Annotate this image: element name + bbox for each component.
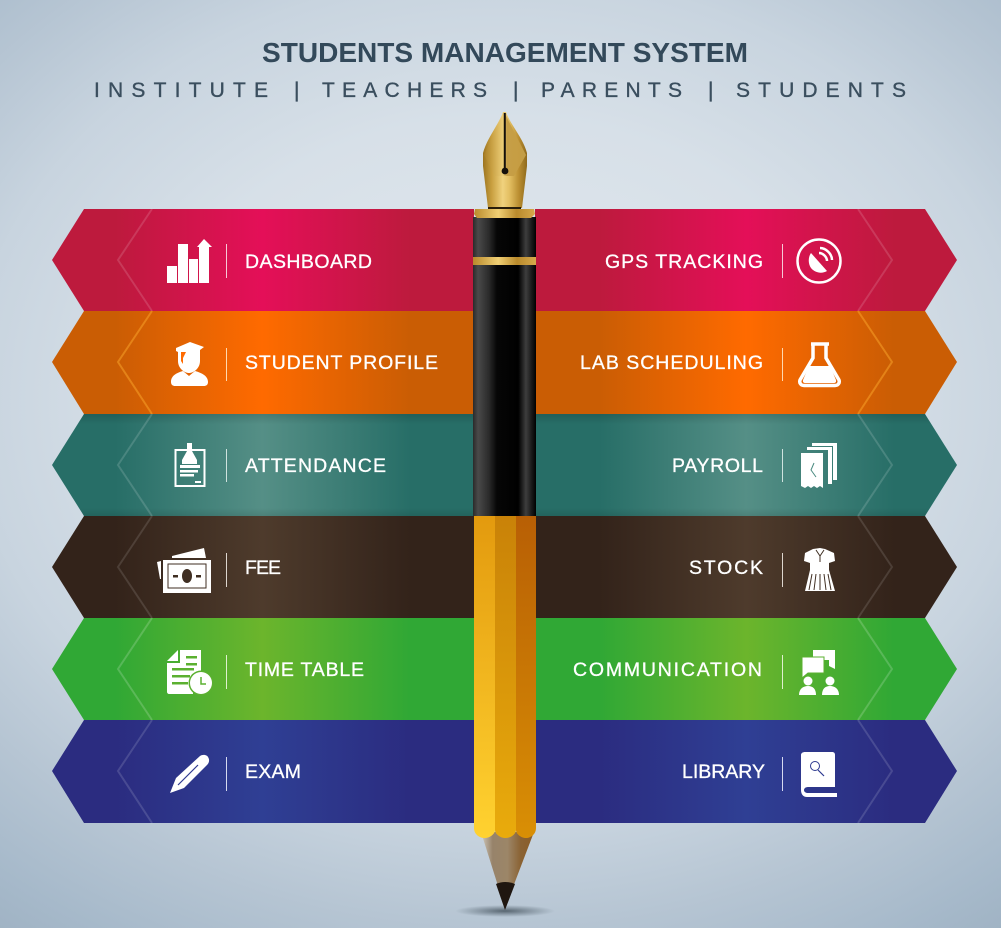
panel: lab scheduling: [535, 311, 957, 414]
subtitle: |: [513, 79, 518, 102]
panel: attendance: [52, 414, 474, 516]
subtitle: [94, 79, 906, 102]
subtitle: INSTITUTE: [94, 79, 268, 102]
subtitle: |: [708, 79, 713, 102]
icon: bar chart: [167, 239, 212, 283]
icon: book with magnifier: [801, 752, 837, 797]
panel: time table: [52, 618, 474, 720]
title: STUDENTS MANAGEMENT SYSTEM: [262, 37, 748, 68]
panel: gps tracking: [535, 209, 957, 311]
label: time table: TIME TABLE: [245, 659, 364, 681]
icon: uniform dress: [804, 548, 835, 591]
panel: dashboard: [52, 209, 474, 311]
pencil wood tip: [481, 832, 534, 908]
label: lab scheduling: LAB SCHEDULING: [580, 352, 763, 374]
icon: pencil: [170, 755, 209, 793]
pencil tip shadow: [455, 905, 555, 917]
panel: student profile: [52, 311, 474, 414]
icon: satellite: [798, 240, 840, 282]
pen collar: [474, 209, 535, 218]
subtitle: TEACHERS: [322, 79, 487, 102]
icon: graduate: [171, 342, 208, 386]
pen nib: [483, 112, 527, 209]
label: payroll: PAYROLL: [672, 455, 763, 477]
icon: attendance sheet: [176, 443, 204, 486]
pen barrel: [473, 217, 536, 516]
label: gps tracking: GPS TRACKING: [605, 251, 763, 273]
subtitle: STUDENTS: [736, 79, 906, 102]
label: communication: COMMUNICATION: [573, 659, 762, 681]
label: exam: EXAM: [245, 761, 301, 783]
icon: people with speech bubbles: [799, 650, 839, 695]
label: fee: FEE: [245, 557, 281, 579]
subtitle: |: [294, 79, 299, 102]
panel: payroll: [535, 414, 957, 516]
pencil body: [474, 516, 536, 838]
pen gold ring: [473, 257, 536, 265]
label: dashboard: DASHBOARD: [245, 251, 372, 273]
panel: communication: [535, 618, 957, 720]
icon: flask: [800, 344, 839, 386]
label: attendance: ATTENDANCE: [245, 455, 386, 477]
pencil lead: [496, 882, 515, 910]
panel: stock: [535, 516, 957, 618]
icon: schedule document with clock: [167, 650, 214, 696]
panel: fee: [52, 516, 474, 618]
panel: library: [535, 720, 957, 823]
subtitle: PARENTS: [541, 79, 682, 102]
panel: exam: [52, 720, 474, 823]
label: student profile: STUDENT PROFILE: [245, 352, 438, 374]
icon: banknotes: [157, 548, 211, 593]
label: stock: STOCK: [689, 557, 763, 579]
label: library: LIBRARY: [682, 761, 765, 783]
icon: payslip stack: [801, 443, 837, 488]
pen and pencil: [473, 112, 536, 910]
